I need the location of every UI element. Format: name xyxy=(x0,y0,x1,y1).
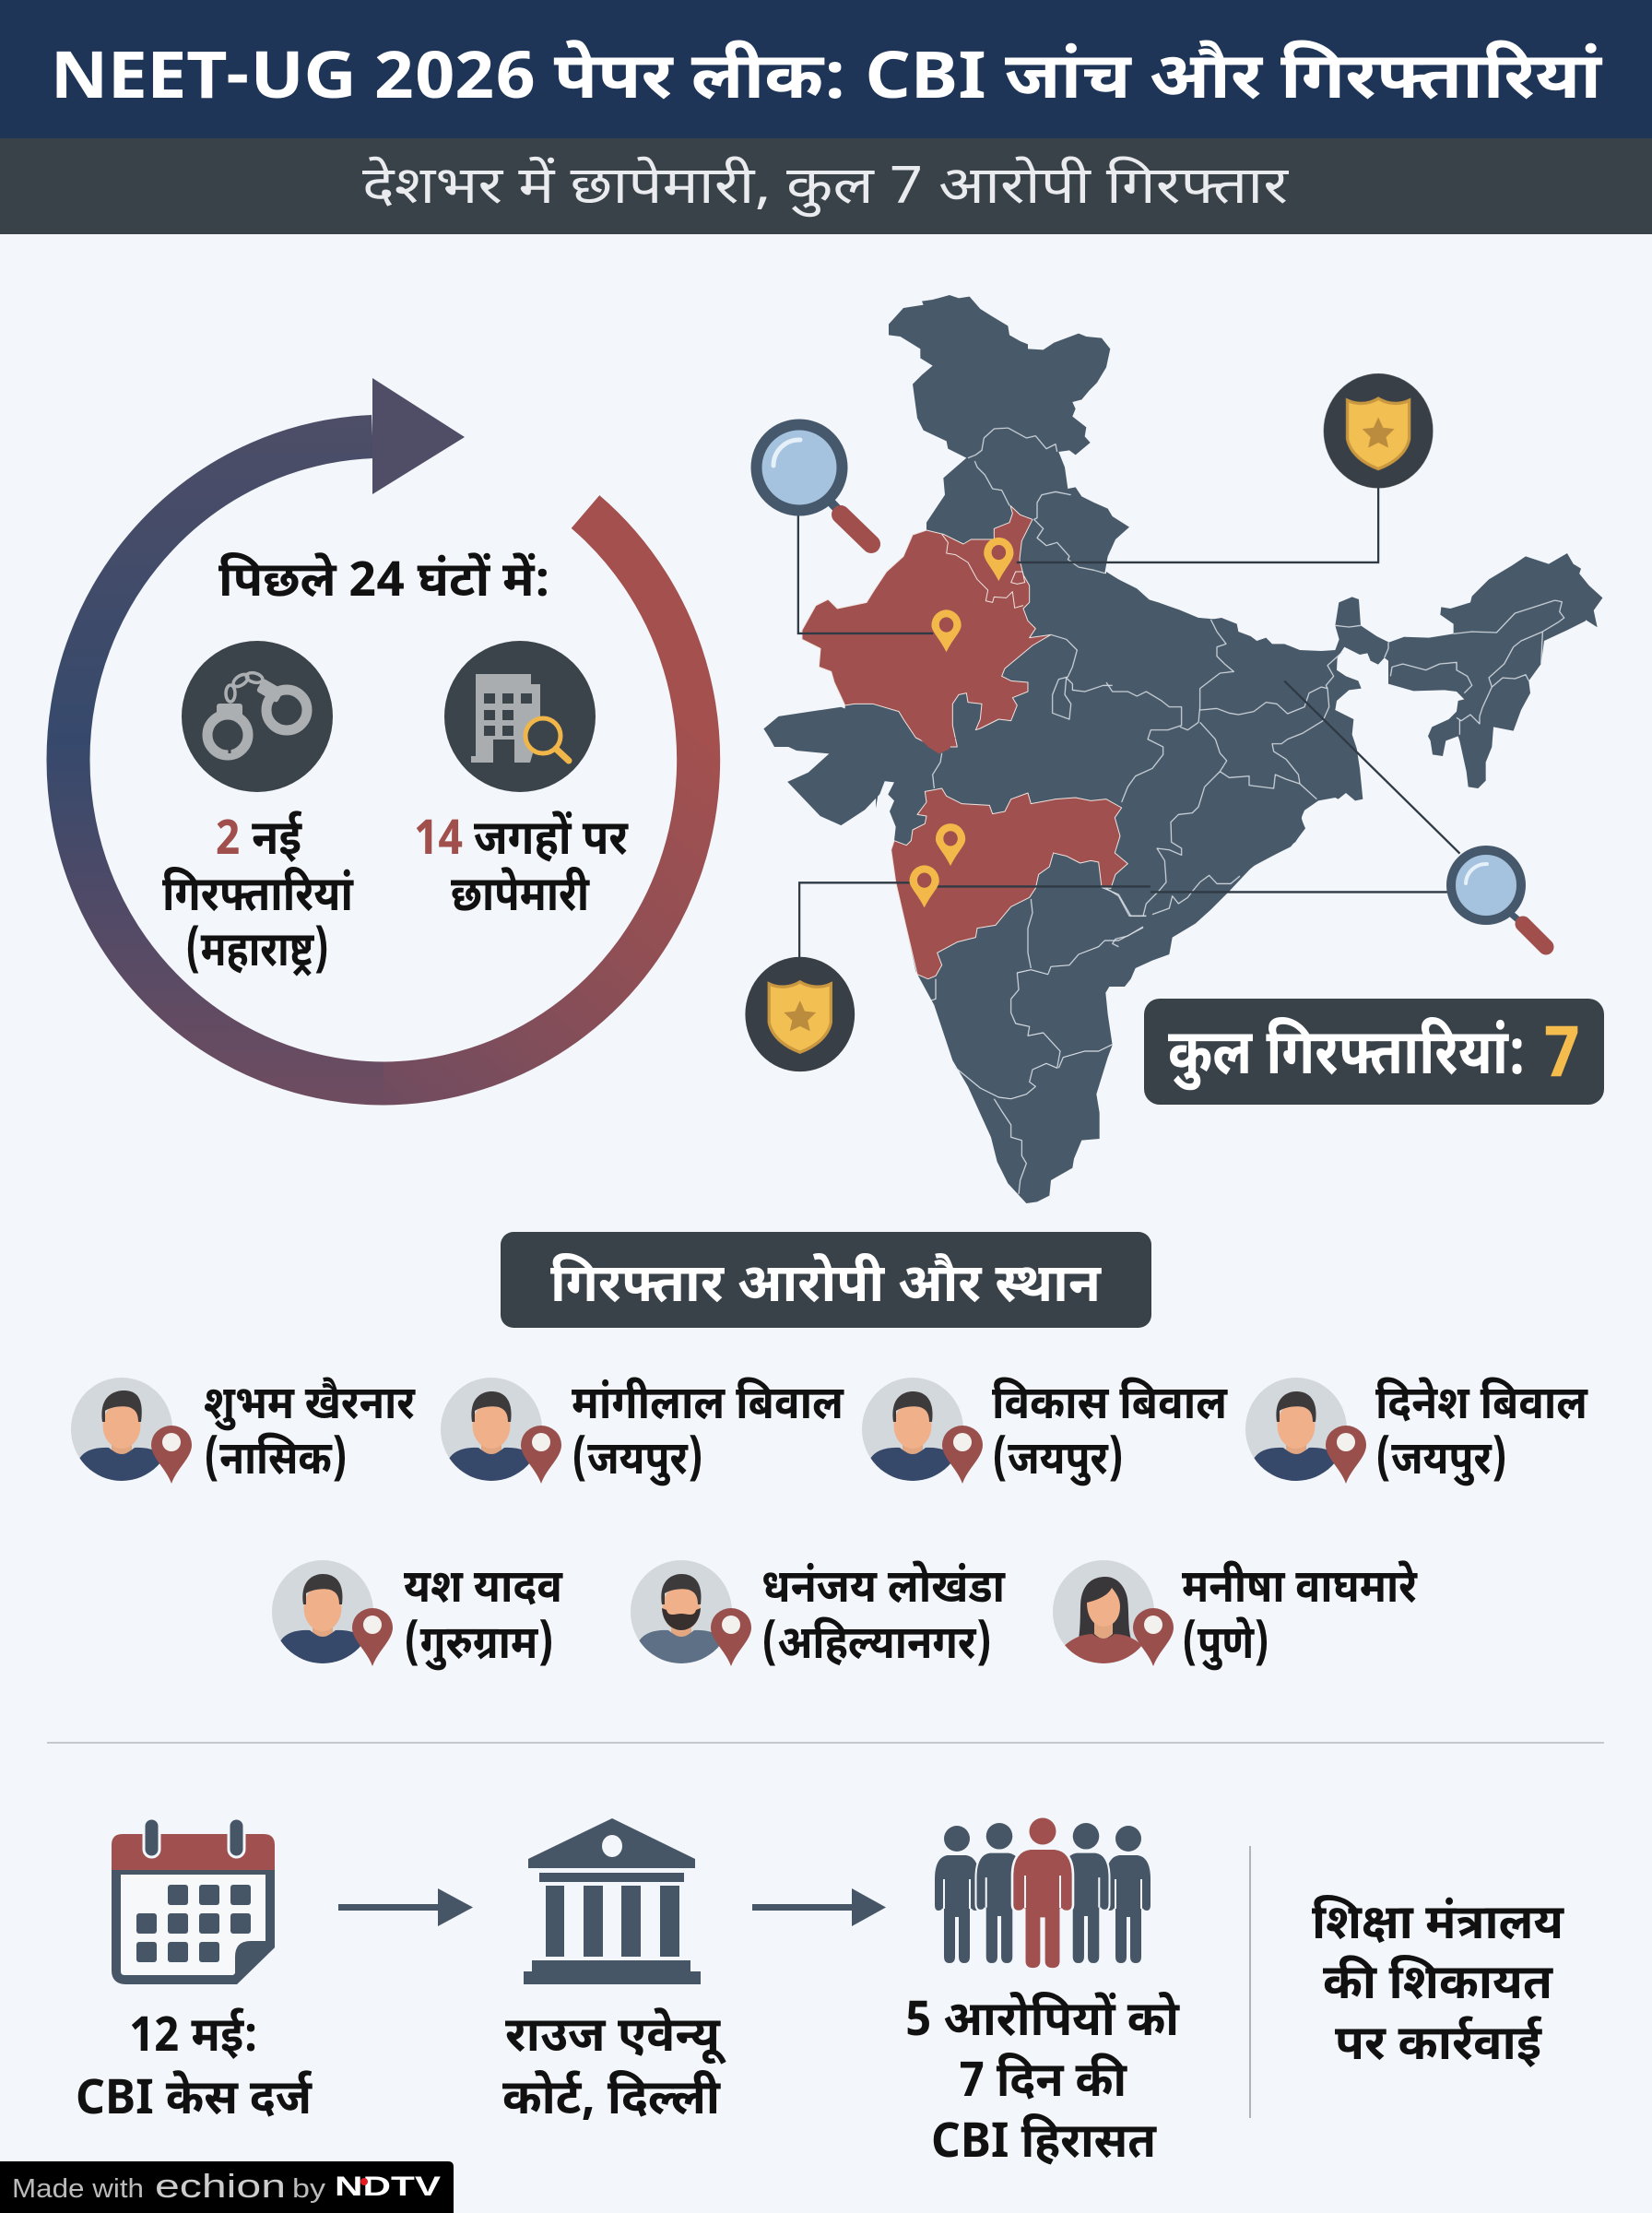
person: Dhananjay Lokhanda: धनंजय लोखंडा xyxy=(761,1560,1006,1621)
text: seven day custody: 7 दिन की xyxy=(959,2053,1128,2116)
person: Yash Yadav xyxy=(272,1560,563,1677)
heading: arrested accused: गिरफ्तार आरोपी और स्थान xyxy=(550,1253,1102,1323)
text: education ministry complaint xyxy=(1312,1896,1564,2079)
text: education ministry complaint: की शिकायत xyxy=(1323,1955,1554,2018)
text: seven day custody: 5 आरोपियों को xyxy=(905,1992,1181,2055)
person: Shubham Khairnar: शुभम खैरनार xyxy=(204,1377,416,1438)
text: case registered: 12 मई: xyxy=(129,2007,258,2071)
circular arrow xyxy=(68,378,699,1083)
callout: total arrests: कुल गिरफ्तारियां: xyxy=(1168,1017,1526,1099)
icon: court building xyxy=(524,1818,701,1984)
heading: last 24 hours: पिछले 24 घंटों में: xyxy=(218,552,550,616)
footer badge: by xyxy=(292,2174,326,2204)
footer badge: echion xyxy=(155,2167,286,2205)
icon: calendar xyxy=(112,1818,275,1980)
panel: India map xyxy=(745,295,1604,1203)
person: Dhananjay Lokhanda: (अहिल्यानगर) xyxy=(761,1616,992,1677)
callout pill shape xyxy=(1144,999,1604,1105)
footer badge xyxy=(0,2161,454,2213)
person: Dinesh Biwal: (जयपुर) xyxy=(1375,1433,1507,1493)
callout number: 7 xyxy=(1543,1014,1580,1106)
person: Dinesh Biwal: दिनेश बिवाल xyxy=(1375,1377,1588,1438)
person: Dinesh Biwal xyxy=(1245,1377,1588,1493)
person: Dhananjay Lokhanda xyxy=(631,1560,1006,1677)
person: Mangilal Biwal: (जयपुर) xyxy=(572,1433,703,1493)
person: Yash Yadav: (गुरुग्राम) xyxy=(404,1617,554,1677)
title bar xyxy=(0,0,1652,138)
footer badge: NDTV xyxy=(335,2172,441,2202)
footer badge: Made with xyxy=(12,2174,144,2204)
person: Mangilal Biwal xyxy=(441,1377,844,1493)
text: case registered: CBI केस दर्ज xyxy=(76,2070,313,2134)
title bar: NEET-UG 2026 पेपर लीक: CBI जांच और गिरफ्तारियां xyxy=(51,39,1603,124)
callout lines xyxy=(798,486,1460,959)
icon: magnifier right xyxy=(1451,850,1546,947)
stat: 14 raids: 14 जगहों पर xyxy=(414,811,629,874)
map: Rajasthan and Haryana highlighted xyxy=(802,505,1051,747)
icon: police badge bottom left xyxy=(745,957,855,1071)
arrow: step two to three xyxy=(752,1888,886,1926)
text: education ministry complaint: पर कार्रवाई xyxy=(1335,2016,1542,2079)
arrow: step one to two xyxy=(338,1888,473,1926)
map: state borders xyxy=(931,428,1564,1194)
person: Vikas Biwal: विकास बिवाल xyxy=(992,1377,1228,1438)
text: education ministry complaint: शिक्षा मंत्रालय xyxy=(1312,1896,1564,1959)
icon: building search xyxy=(444,641,596,792)
text: Rouse Avenue court: राउज एवेन्यू xyxy=(505,2007,726,2071)
person: Manisha Waghmare xyxy=(1053,1560,1418,1677)
icon: five accused group xyxy=(934,1818,1151,1969)
text: Rouse Avenue court: कोर्ट, दिल्ली xyxy=(502,2070,722,2134)
text: Rouse Avenue court xyxy=(502,2007,726,2134)
stat label: arrests: गिरफ्तारियां xyxy=(162,868,355,930)
icon: police badge top right xyxy=(1324,373,1433,488)
person: Yash Yadav: यश यादव xyxy=(404,1561,563,1621)
map landmass xyxy=(763,295,1602,1203)
subtitle bar xyxy=(0,138,1652,234)
person: Shubham Khairnar xyxy=(71,1377,416,1493)
location pins on map xyxy=(910,538,1013,907)
person: Shubham Khairnar: (नासिक) xyxy=(204,1432,348,1493)
stat label: Maharashtra: (महाराष्ट्र) xyxy=(185,923,329,986)
icon: magnifier left xyxy=(756,424,871,544)
text: case registered xyxy=(76,2007,313,2134)
person: Vikas Biwal: (जयपुर) xyxy=(992,1433,1124,1493)
heading: arrested accused xyxy=(501,1232,1151,1328)
text: seven day custody xyxy=(905,1992,1181,2177)
person: Manisha Waghmare: (पुणे) xyxy=(1182,1616,1269,1677)
person: Vikas Biwal xyxy=(862,1377,1228,1493)
person: Mangilal Biwal: मांगीलाल बिवाल xyxy=(572,1377,844,1438)
stat label: raids: छापेमारी xyxy=(451,867,590,930)
map: Maharashtra highlighted xyxy=(891,738,1127,979)
person: Manisha Waghmare: मनीषा वाघमारे xyxy=(1182,1560,1418,1621)
text: seven day custody: CBI हिरासत xyxy=(931,2114,1158,2177)
panel: last 24 hours xyxy=(68,378,699,1083)
stat: 2 new arrests: 2 नई xyxy=(216,811,302,874)
subtitle bar: देशभर में छापेमारी, कुल 7 आरोपी गिरफ्तार xyxy=(362,156,1289,224)
icon: handcuffs xyxy=(182,641,333,792)
